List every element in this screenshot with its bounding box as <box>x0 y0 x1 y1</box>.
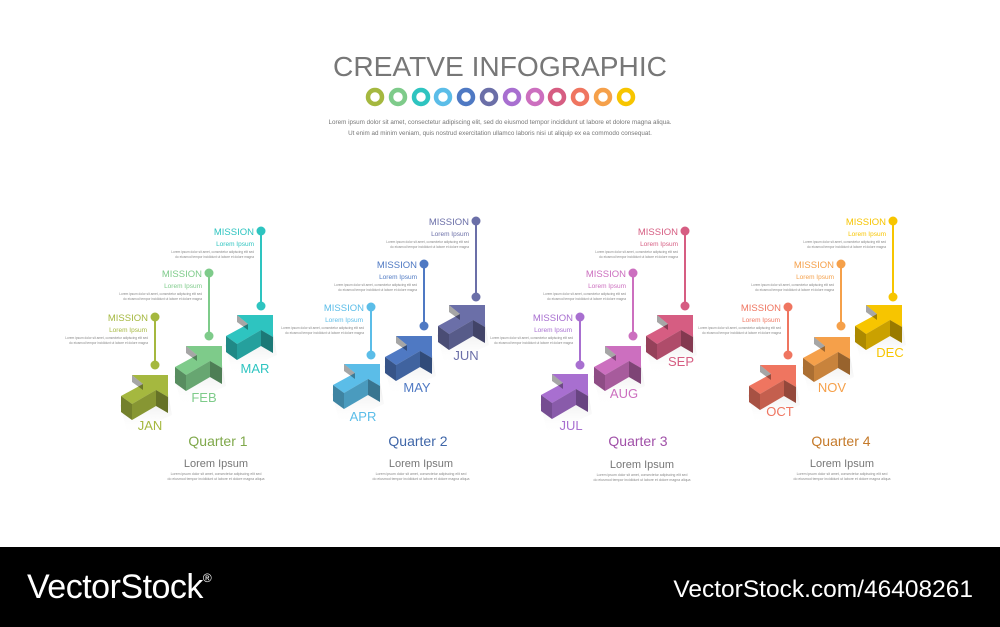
arrow: AUG <box>593 346 645 406</box>
pins and mission labels: Lorem Ipsum <box>164 283 202 290</box>
pins and mission labels: Lorem Ipsum <box>216 241 254 248</box>
month labels <box>138 345 904 433</box>
pins and mission labels <box>65 216 898 370</box>
pins and mission labels: MISSION <box>533 313 573 324</box>
pins and mission labels: Lorem ipsum dolor sit amet, consectetur adipiscing elit sed <box>595 250 678 254</box>
month labels: FEB <box>191 390 217 405</box>
pins and mission labels: Lorem Ipsum <box>588 283 626 290</box>
intro text <box>328 119 672 137</box>
month labels: AUG <box>610 386 638 401</box>
pins and mission labels: MISSION <box>324 303 364 314</box>
arrow: NOV <box>802 337 854 397</box>
pins and mission labels: Lorem ipsum dolor sit amet, consectetur adipiscing elit sed <box>281 326 364 330</box>
arrow: APR <box>332 364 384 424</box>
pins and mission labels: Lorem Ipsum <box>848 231 886 238</box>
month labels: JUN <box>453 348 479 363</box>
footer bar: ® <box>203 571 212 585</box>
pins and mission labels: Lorem Ipsum <box>379 274 417 281</box>
pins and mission labels: Lorem Ipsum <box>640 241 678 248</box>
quarter captions: do eiusmod tempor incididunt ut labore et dolore magna aliqua <box>794 477 890 481</box>
pins and mission labels: MISSION <box>846 217 886 228</box>
intro text: Lorem ipsum dolor sit amet, consectetur adipiscing elit, sed do eiusmod tempor incididunt ut labore et dolore magna aliqua. <box>328 119 672 126</box>
pins and mission labels: do eiusmod tempor incididunt ut labore et dolore magna <box>494 341 573 345</box>
quarter captions: Lorem Ipsum <box>389 458 453 470</box>
month labels: OCT <box>766 404 794 419</box>
pins and mission labels: Lorem Ipsum <box>109 327 147 334</box>
quarter captions <box>168 433 890 482</box>
pins and mission labels: Lorem ipsum dolor sit amet, consectetur adipiscing elit sed <box>334 283 417 287</box>
arrow: FEB <box>174 346 226 406</box>
arrow: DEC <box>854 305 906 365</box>
footer bar: VectorStock <box>27 568 203 606</box>
quarter captions: Lorem ipsum dolor sit amet, consectetur adipiscing elit sed <box>376 472 466 476</box>
pins and mission labels: do eiusmod tempor incididunt ut labore et dolore magna <box>175 255 254 259</box>
pins and mission labels: MISSION <box>586 269 626 280</box>
footer bar <box>0 547 1000 627</box>
arrow: SEP <box>645 315 697 375</box>
arrow: MAY <box>384 336 436 396</box>
quarter captions: do eiusmod tempor incididunt ut labore et dolore magna aliqua <box>594 478 690 482</box>
pins and mission labels: MISSION <box>162 269 202 280</box>
month labels: MAY <box>403 380 431 395</box>
footer bar: VectorStock.com/46408261 <box>673 576 973 603</box>
pins and mission labels: MISSION <box>741 303 781 314</box>
arrow: JUN <box>437 305 489 365</box>
pins and mission labels: Lorem ipsum dolor sit amet, consectetur adipiscing elit sed <box>751 283 834 287</box>
pins and mission labels: do eiusmod tempor incididunt ut labore et dolore magna <box>599 255 678 259</box>
month labels: DEC <box>876 345 904 360</box>
pins and mission labels: MISSION <box>794 260 834 271</box>
pins and mission labels: MISSION <box>108 313 148 324</box>
pins and mission labels: do eiusmod tempor incididunt ut labore et dolore magna <box>755 288 834 292</box>
quarter captions: Quarter 4 <box>811 433 871 449</box>
month labels: SEP <box>668 354 694 369</box>
pins and mission labels: Lorem Ipsum <box>431 231 469 238</box>
month labels: MAR <box>241 361 269 376</box>
arrow: JUL <box>540 374 592 434</box>
quarter captions: Lorem Ipsum <box>610 459 674 471</box>
pins and mission labels: Lorem ipsum dolor sit amet, consectetur adipiscing elit sed <box>543 292 626 296</box>
month labels: JAN <box>138 418 162 433</box>
pins and mission labels: Lorem Ipsum <box>325 317 363 324</box>
pins and mission labels: Lorem Ipsum <box>742 317 780 324</box>
arrow: MAR <box>225 315 277 375</box>
pins and mission labels: MISSION <box>638 227 678 238</box>
quarter captions: Quarter 1 <box>188 433 248 449</box>
pins and mission labels: do eiusmod tempor incididunt ut labore et dolore magna <box>702 331 781 335</box>
pins and mission labels: MISSION <box>214 227 254 238</box>
month labels: NOV <box>818 380 846 395</box>
pins and mission labels: do eiusmod tempor incididunt ut labore et dolore magna <box>69 341 148 345</box>
pins and mission labels: Lorem ipsum dolor sit amet, consectetur adipiscing elit sed <box>490 336 573 340</box>
pins and mission labels: Lorem Ipsum <box>534 327 572 334</box>
pins and mission labels: MISSION <box>429 217 469 228</box>
quarter captions: do eiusmod tempor incididunt ut labore et dolore magna aliqua <box>168 477 264 481</box>
title: CREATVE INFOGRAPHIC <box>333 51 667 82</box>
pins and mission labels: do eiusmod tempor incididunt ut labore et dolore magna <box>338 288 417 292</box>
pins and mission labels: Lorem ipsum dolor sit amet, consectetur adipiscing elit sed <box>386 240 469 244</box>
pins and mission labels: Lorem ipsum dolor sit amet, consectetur adipiscing elit sed <box>698 326 781 330</box>
pins and mission labels: do eiusmod tempor incididunt ut labore et dolore magna <box>390 245 469 249</box>
color dots row <box>368 90 633 104</box>
pins and mission labels: Lorem ipsum dolor sit amet, consectetur adipiscing elit sed <box>119 292 202 296</box>
month labels: APR <box>350 409 376 424</box>
intro text: Ut enim ad minim veniam, quis nostrud exercitation ullamco laboris nisi ut aliquip ex ea commodo consequat. <box>348 130 652 137</box>
quarter captions: Lorem Ipsum <box>810 458 874 470</box>
arrow: OCT <box>748 365 800 425</box>
month labels: JUL <box>559 418 583 433</box>
quarter captions: Quarter 2 <box>388 433 448 449</box>
quarter captions: do eiusmod tempor incididunt ut labore et dolore magna aliqua <box>373 477 469 481</box>
arrow: JAN <box>120 375 172 435</box>
pins and mission labels: Lorem ipsum dolor sit amet, consectetur adipiscing elit sed <box>171 250 254 254</box>
pins and mission labels: do eiusmod tempor incididunt ut labore et dolore magna <box>547 297 626 301</box>
pins and mission labels: Lorem ipsum dolor sit amet, consectetur adipiscing elit sed <box>65 336 148 340</box>
quarter captions: Lorem ipsum dolor sit amet, consectetur adipiscing elit sed <box>597 473 687 477</box>
quarter captions: Lorem ipsum dolor sit amet, consectetur adipiscing elit sed <box>797 472 887 476</box>
pins and mission labels: MISSION <box>377 260 417 271</box>
pins and mission labels: do eiusmod tempor incididunt ut labore et dolore magna <box>123 297 202 301</box>
pins and mission labels: do eiusmod tempor incididunt ut labore et dolore magna <box>807 245 886 249</box>
quarter captions: Quarter 3 <box>608 433 668 449</box>
quarter captions: Lorem ipsum dolor sit amet, consectetur adipiscing elit sed <box>171 472 261 476</box>
quarter captions: Lorem Ipsum <box>184 458 248 470</box>
pins and mission labels: Lorem ipsum dolor sit amet, consectetur adipiscing elit sed <box>803 240 886 244</box>
pins and mission labels: Lorem Ipsum <box>796 274 834 281</box>
pins and mission labels: do eiusmod tempor incididunt ut labore et dolore magna <box>285 331 364 335</box>
